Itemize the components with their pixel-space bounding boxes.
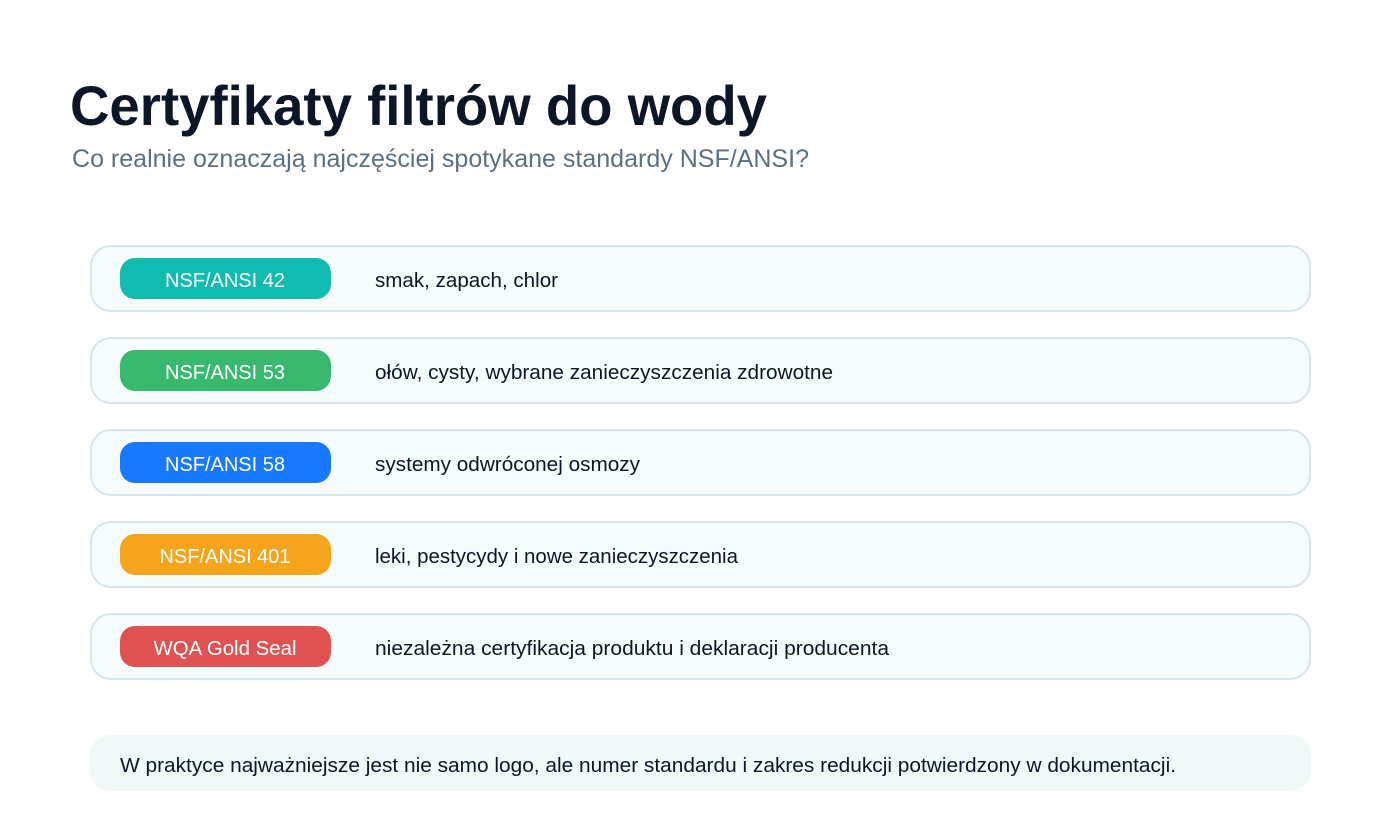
- badge: NSF/ANSI 53: NSF/ANSI 53: [165, 362, 285, 384]
- description: NSF/ANSI 42: smak, zapach, chlor: [375, 270, 558, 292]
- badge: NSF/ANSI 42: [120, 258, 331, 299]
- badge: WQA Gold Seal: [120, 626, 331, 667]
- description: NSF/ANSI 401: leki, pestycydy i nowe zanieczyszczenia: [375, 546, 739, 568]
- badge: NSF/ANSI 58: [120, 442, 331, 483]
- callout: practical note: W praktyce najważniejsze jest nie samo logo, ale numer standardu i zakres redukcji potwierdzony w dokumentacji.: [120, 755, 1176, 777]
- callout: practical note: [90, 735, 1311, 791]
- badge: NSF/ANSI 401: NSF/ANSI 401: [160, 546, 290, 568]
- description: NSF/ANSI 53: ołów, cysty, wybrane zanieczyszczenia zdrowotne: [375, 362, 833, 384]
- title: Certyfikaty filtrów do wody: [70, 74, 767, 137]
- panel: WQA Gold Seal row: [91, 614, 1310, 679]
- badge: NSF/ANSI 42: NSF/ANSI 42: [165, 270, 285, 292]
- panel: NSF/ANSI 58 row: [91, 430, 1310, 495]
- panel: NSF/ANSI 401 row: [91, 522, 1310, 587]
- subtitle: Co realnie oznaczają najczęściej spotykane standardy NSF/ANSI?: [72, 145, 809, 173]
- panel: NSF/ANSI 53 row: [91, 338, 1310, 403]
- panel: NSF/ANSI 42 row: [91, 246, 1310, 311]
- description: NSF/ANSI 58: systemy odwróconej osmozy: [375, 454, 640, 476]
- badge: WQA Gold Seal: WQA Gold Seal: [154, 638, 296, 660]
- description: WQA Gold Seal: niezależna certyfikacja produktu i deklaracji producenta: [375, 638, 890, 660]
- badge: NSF/ANSI 53: [120, 350, 331, 391]
- badge: NSF/ANSI 58: NSF/ANSI 58: [165, 454, 285, 476]
- badge: NSF/ANSI 401: [120, 534, 331, 575]
